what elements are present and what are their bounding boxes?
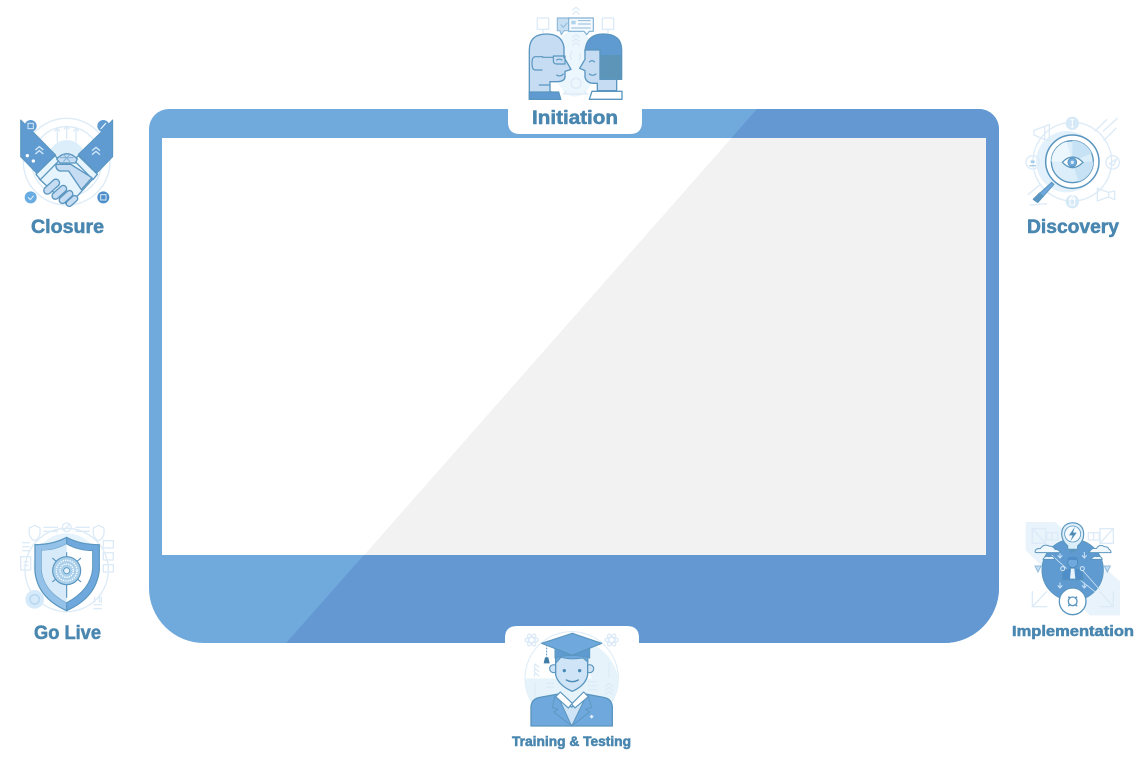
magnifier handle xyxy=(1028,182,1054,205)
left cuff xyxy=(21,120,56,173)
bottom cover under tab xyxy=(505,643,639,647)
fingers xyxy=(42,178,79,208)
label: go live: Go Live xyxy=(34,623,101,644)
icon: implementation, lightbulb and person xyxy=(1026,522,1120,615)
label: discovery: Discovery xyxy=(1027,217,1119,238)
icon: go live, shield xyxy=(21,523,113,612)
label: training and testing: Training & Testing xyxy=(512,734,631,749)
suit xyxy=(531,692,612,726)
clasped hands xyxy=(39,158,94,206)
icon: closure, handshake xyxy=(21,118,113,208)
person xyxy=(1061,557,1084,580)
label: initiation: Initiation xyxy=(532,108,618,129)
tab: training and testing xyxy=(505,626,639,644)
mortarboard xyxy=(542,633,602,663)
icon: initiation, two faces xyxy=(529,7,622,99)
label: implementation: Implementation xyxy=(1012,623,1134,640)
face xyxy=(550,653,594,691)
right cuff xyxy=(78,120,113,173)
gear circle xyxy=(1059,588,1086,615)
right person xyxy=(580,34,622,99)
label: closure: Closure xyxy=(31,217,104,238)
clouds xyxy=(1035,545,1111,559)
left person xyxy=(529,34,571,99)
icon: training and testing, graduate xyxy=(525,632,618,726)
tab: initiation xyxy=(508,109,642,134)
shield xyxy=(35,537,99,611)
icon: discovery, magnifier with eye xyxy=(1026,117,1119,208)
shield wheel emblem xyxy=(53,553,81,597)
lightbulb xyxy=(1062,523,1084,553)
screen xyxy=(162,138,986,555)
monitor frame xyxy=(149,109,1010,650)
